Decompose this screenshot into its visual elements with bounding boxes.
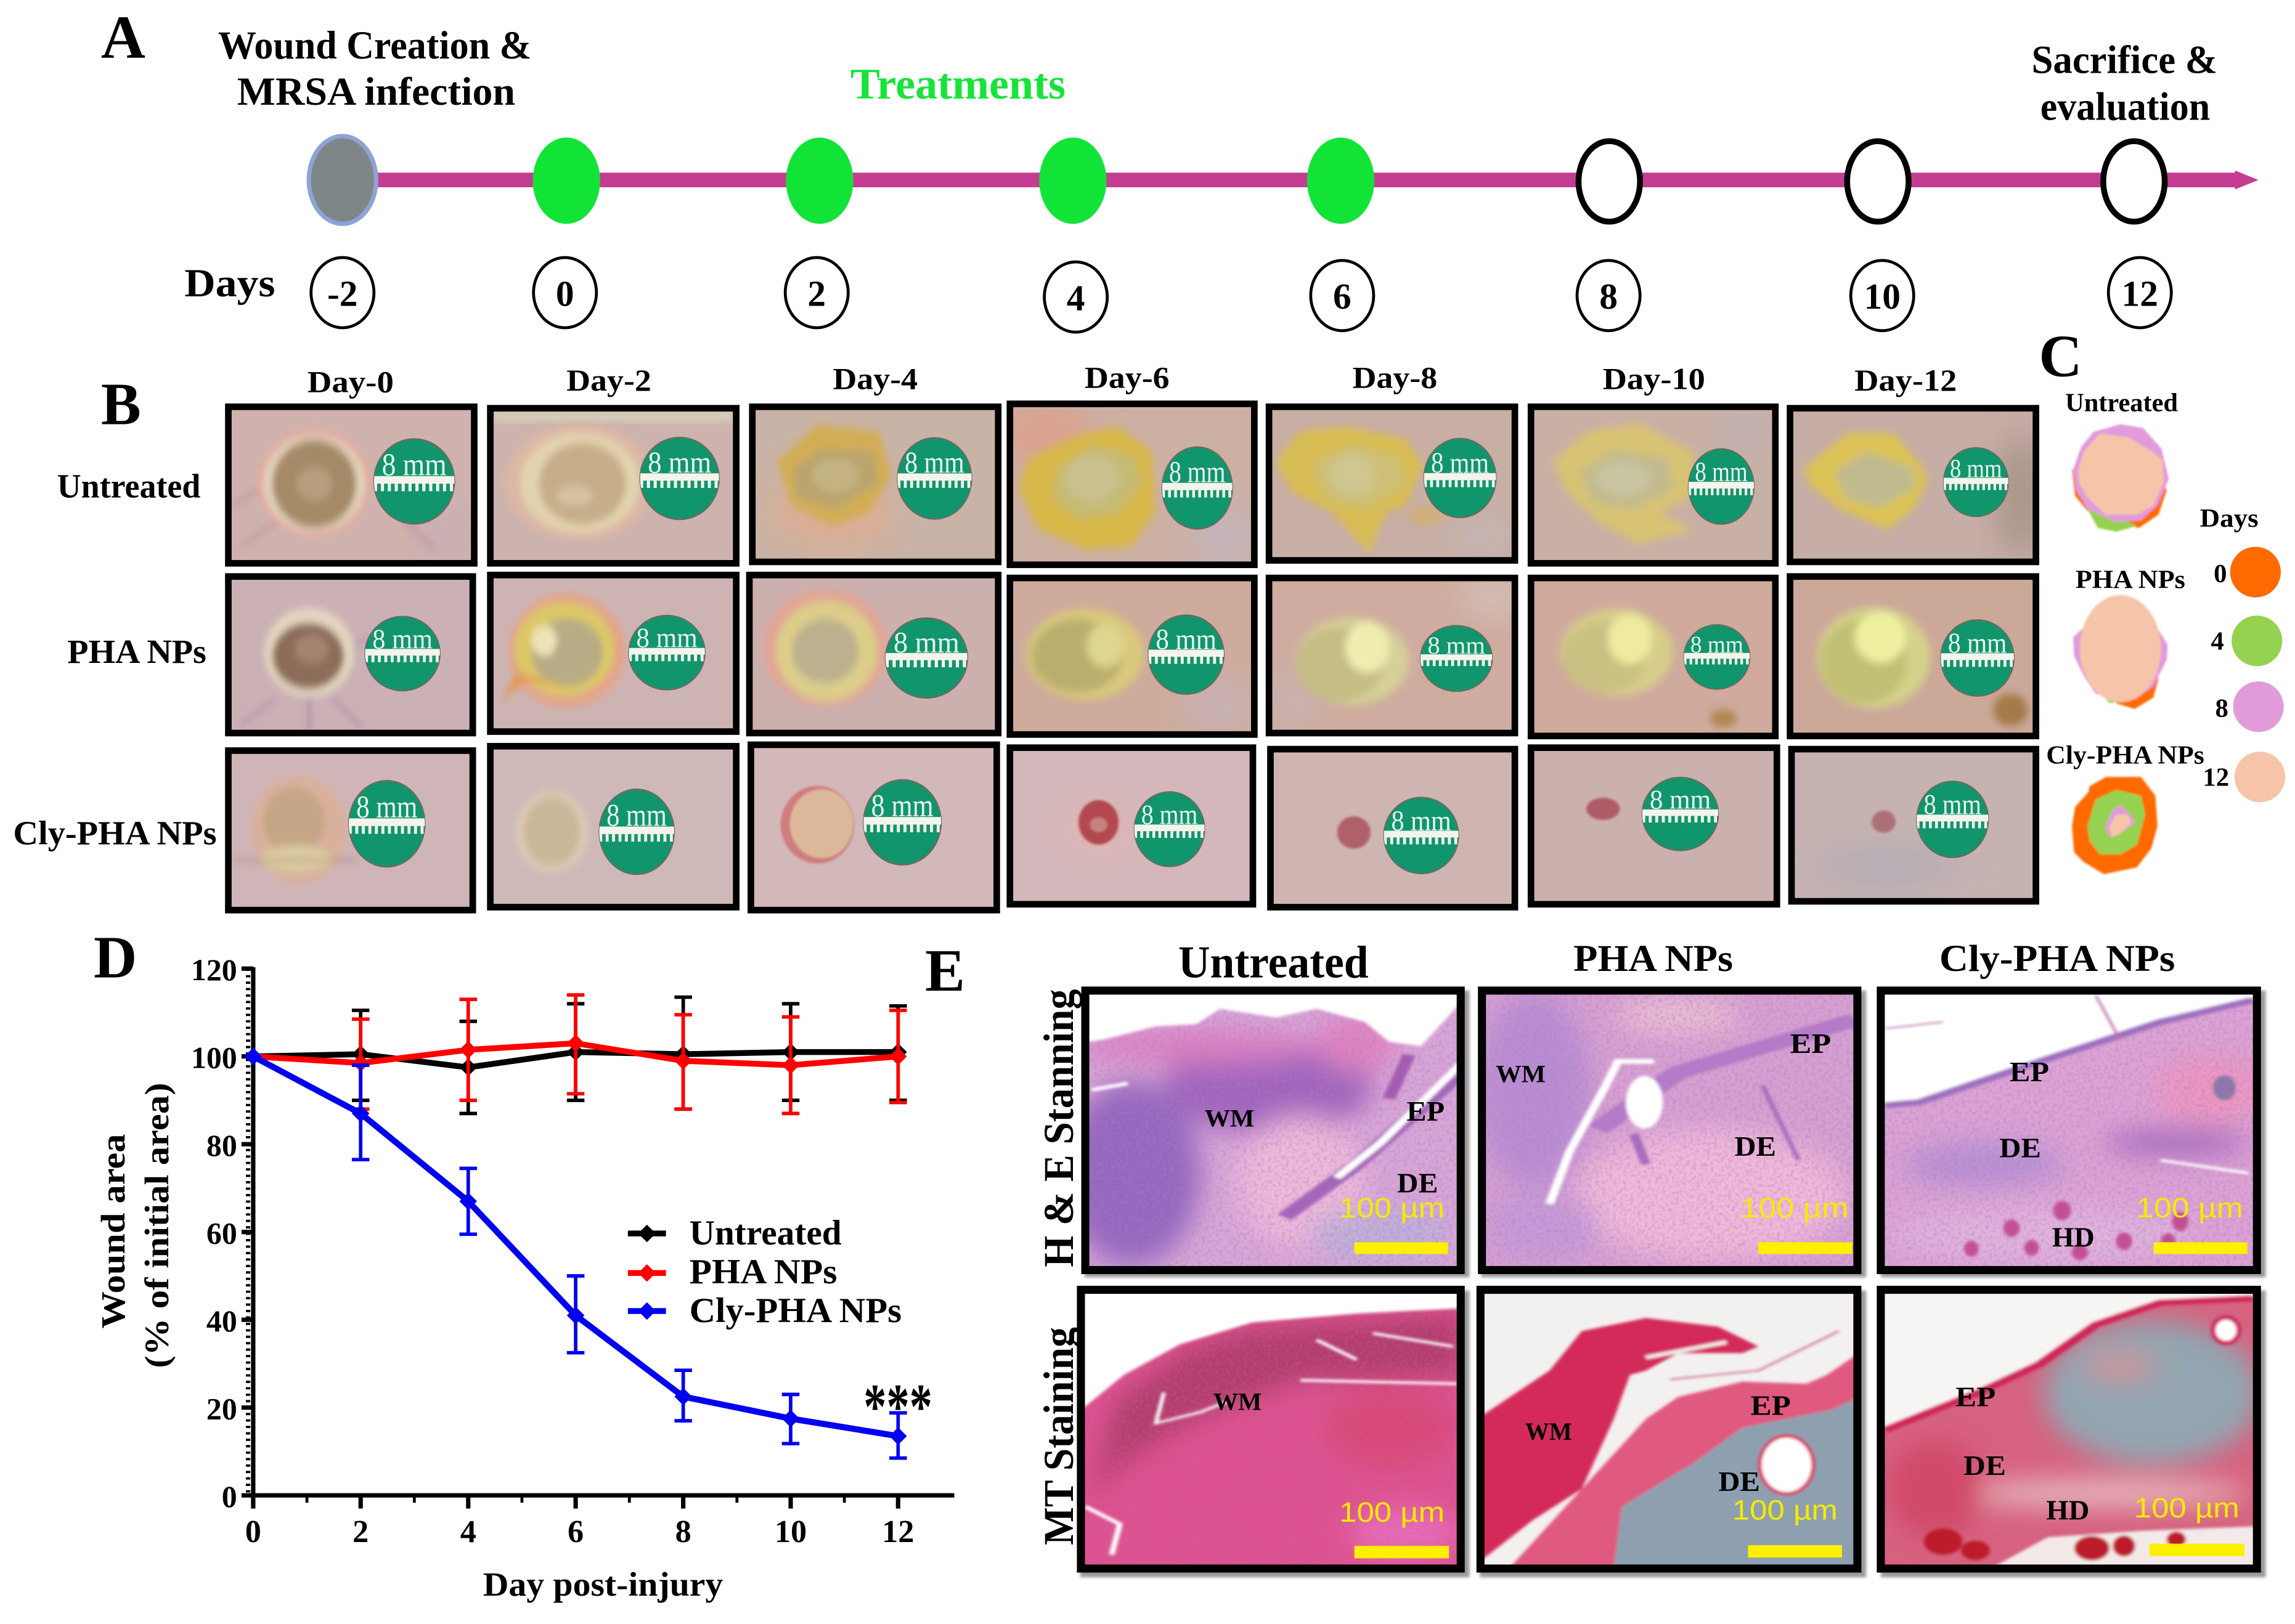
row headings: groups: Cly-PHA NPs bbox=[13, 814, 217, 851]
x axis tick labels: 0 bbox=[245, 1514, 261, 1549]
legend: days: 0 bbox=[2214, 559, 2227, 588]
column headings bbox=[1178, 936, 2175, 987]
photo: untreated day 10 bbox=[1531, 407, 1780, 563]
photo: Cly-PHA day 10 bbox=[1531, 748, 1777, 904]
photo: PHA day 6 bbox=[1010, 578, 1259, 734]
column headings: days: Day-0 bbox=[308, 365, 394, 399]
x axis tick labels: 8 bbox=[675, 1514, 691, 1549]
labels: EP bbox=[1406, 1096, 1445, 1127]
photo: untreated day 12: 8 mm bbox=[1950, 454, 2002, 483]
labels: DE bbox=[1397, 1168, 1438, 1199]
column headings: days: Day-10 bbox=[1603, 362, 1705, 396]
column headings: Cly-PHA NPs bbox=[1939, 938, 2175, 980]
labels: DE bbox=[1718, 1466, 1760, 1497]
histology: H&E PHA NPs bbox=[1477, 988, 1862, 1273]
axes bbox=[242, 967, 955, 1509]
row headings: groups bbox=[13, 467, 217, 851]
label: WM bbox=[1213, 1387, 1262, 1415]
labels: HD bbox=[2052, 1222, 2095, 1253]
photo: untreated day 4: 8 mm bbox=[905, 446, 964, 480]
x axis title: Day post-injury bbox=[483, 1565, 723, 1603]
label: days: Days bbox=[184, 261, 275, 305]
labels: EP bbox=[1750, 1391, 1791, 1421]
labels bbox=[1496, 1028, 1831, 1162]
labels: DE bbox=[1999, 1133, 2041, 1164]
scale bar: 100 µm bbox=[2136, 1192, 2243, 1224]
photo: Cly-PHA day 6: 8 mm bbox=[1141, 799, 1197, 830]
day number circles: 12 bbox=[2122, 273, 2158, 314]
column headings: days: Day-4 bbox=[833, 362, 918, 396]
label: wound creation: MRSA infection bbox=[237, 70, 515, 113]
day number circles: -2 bbox=[327, 273, 357, 314]
row headings bbox=[1035, 989, 1082, 1545]
column headings: Untreated bbox=[1178, 936, 1369, 987]
series: Cly-PHA NPs bbox=[245, 1047, 907, 1458]
day number circles: 0 bbox=[556, 273, 574, 314]
column headings: days bbox=[308, 360, 1957, 399]
tracing labels: PHA NPs bbox=[2076, 566, 2185, 595]
label: treatments: Treatments bbox=[850, 60, 1066, 108]
panel letter A: A bbox=[101, 3, 145, 71]
significance stars: *** bbox=[863, 1371, 932, 1442]
labels bbox=[1955, 1381, 2089, 1525]
panel letter C: C bbox=[2039, 323, 2082, 389]
scale bar bbox=[1732, 1494, 1842, 1557]
scale bar: 100 µm bbox=[1339, 1496, 1445, 1528]
scale bar: 100 µm bbox=[1740, 1192, 1849, 1224]
scale bar: 100 µm bbox=[2134, 1492, 2240, 1524]
labels bbox=[1999, 1057, 2095, 1253]
day number circles: 10 bbox=[1864, 276, 1901, 317]
y axis tick labels bbox=[191, 953, 237, 1514]
y axis title bbox=[94, 1082, 176, 1368]
tracing: PHA NPs bbox=[2073, 595, 2168, 709]
legend bbox=[628, 1214, 902, 1330]
panel B: wound photographs bbox=[13, 360, 2044, 910]
panel C: wound area tracings bbox=[2039, 323, 2285, 874]
photo: Cly-PHA day 10: 8 mm bbox=[1650, 785, 1711, 815]
photo: Cly-PHA day 12: 8 mm bbox=[1923, 789, 1981, 820]
x axis tick labels: 2 bbox=[353, 1514, 369, 1549]
panel letter B: B bbox=[101, 371, 141, 438]
photo: Cly-PHA day 2 bbox=[491, 746, 736, 907]
legend: Cly-PHA NPs bbox=[690, 1291, 902, 1330]
histology: H&E untreated bbox=[1064, 987, 1465, 1273]
photo: Cly-PHA day 4: 8 mm bbox=[871, 788, 934, 823]
legend: days: 8 bbox=[2216, 694, 2228, 723]
legend: days: Days bbox=[2200, 504, 2259, 533]
legend: days: 4 bbox=[2211, 627, 2224, 656]
row headings: MT Staining bbox=[1035, 1327, 1082, 1545]
legend: PHA NPs bbox=[690, 1253, 838, 1291]
scale bar bbox=[2136, 1192, 2248, 1254]
photo: PHA day 6: 8 mm bbox=[1156, 623, 1217, 656]
y axis tick labels: 40 bbox=[206, 1304, 237, 1338]
x axis tick labels: 12 bbox=[882, 1514, 914, 1549]
row headings: H & E Stanning bbox=[1035, 989, 1082, 1267]
y axis title: Wound area bbox=[94, 1134, 132, 1328]
labels: DE bbox=[1963, 1450, 2006, 1481]
photo: untreated day 8: 8 mm bbox=[1431, 446, 1489, 479]
histology: MT Cly-PHA NPs bbox=[1877, 1286, 2265, 1572]
photo: untreated day 2: 8 mm bbox=[648, 445, 711, 479]
scale bar: 100 µm bbox=[1339, 1192, 1445, 1224]
column headings: days: Day-8 bbox=[1352, 360, 1437, 394]
labels: EP bbox=[2010, 1057, 2049, 1087]
labels: EP bbox=[1790, 1028, 1831, 1059]
y axis tick labels: 0 bbox=[222, 1480, 237, 1514]
frame shadows bbox=[1080, 991, 2265, 1577]
photo: PHA day 0 bbox=[229, 577, 473, 733]
timeline marker: wound creation day -2 bbox=[309, 136, 376, 224]
labels: WM bbox=[1525, 1418, 1572, 1445]
photo: Cly-PHA day 0: 8 mm bbox=[356, 789, 417, 825]
tracing labels: Cly-PHA NPs bbox=[2046, 741, 2204, 770]
panel E: histology bbox=[925, 936, 2265, 1577]
labels: EP bbox=[1955, 1381, 1995, 1412]
photo: untreated day 12 bbox=[1790, 408, 2044, 562]
series: untreated bbox=[253, 997, 907, 1113]
photo: PHA day 12 bbox=[1790, 577, 2036, 736]
photo: untreated day 0: 8 mm bbox=[382, 447, 447, 482]
legend: days bbox=[2200, 504, 2285, 802]
x axis tick labels: 6 bbox=[568, 1514, 584, 1549]
column headings: days: Day-12 bbox=[1854, 363, 1957, 397]
day number circles: 8 bbox=[1599, 276, 1618, 317]
photo: untreated day 0 bbox=[229, 407, 475, 563]
scale bar: 100 µm bbox=[1732, 1494, 1838, 1525]
photo: PHA day 8 bbox=[1266, 577, 1526, 733]
photo: untreated day 10: 8 mm bbox=[1695, 457, 1748, 488]
photo: Cly-PHA day 8 bbox=[1270, 749, 1515, 907]
label: wound creation: Wound Creation & bbox=[218, 23, 531, 67]
timeline markers: untreated days bbox=[1578, 141, 2165, 222]
photo: untreated day 4 bbox=[752, 407, 998, 562]
panel D: wound area chart bbox=[94, 924, 955, 1603]
row headings: groups: Untreated bbox=[57, 467, 200, 505]
y axis tick labels: 100 bbox=[191, 1041, 237, 1075]
labels bbox=[1525, 1391, 1791, 1497]
photo: PHA day 8: 8 mm bbox=[1427, 633, 1485, 660]
tracing labels: Untreated bbox=[2065, 388, 2178, 417]
photo: Cly-PHA day 4 bbox=[751, 745, 997, 910]
photo: PHA day 0: 8 mm bbox=[372, 623, 433, 654]
scale bar bbox=[2134, 1492, 2244, 1556]
photo: Cly-PHA day 6 bbox=[1010, 748, 1253, 904]
x axis tick labels bbox=[245, 1514, 914, 1549]
y axis title: (% of initial area) bbox=[138, 1082, 176, 1368]
column headings: days: Day-2 bbox=[566, 363, 651, 397]
photo: Cly-PHA day 12 bbox=[1792, 749, 2036, 901]
scale bar bbox=[1339, 1192, 1448, 1254]
timeline markers: treatment days bbox=[533, 137, 1374, 224]
labels: HD bbox=[2046, 1495, 2089, 1525]
column headings: PHA NPs bbox=[1573, 938, 1733, 980]
photo: PHA day 2 bbox=[491, 575, 736, 731]
photo: Cly-PHA day 2: 8 mm bbox=[606, 798, 667, 833]
panel A: treatment timeline bbox=[101, 3, 2259, 332]
photo: Cly-PHA day 8: 8 mm bbox=[1391, 805, 1451, 836]
photo: untreated day 6: 8 mm bbox=[1169, 456, 1226, 489]
label: sacrifice and evaluation bbox=[2031, 38, 2217, 129]
photo: untreated day 8 bbox=[1269, 407, 1515, 561]
y axis tick labels: 60 bbox=[206, 1217, 237, 1251]
labels: WM bbox=[1496, 1060, 1546, 1087]
panel letter D: D bbox=[94, 924, 137, 991]
x axis tick labels: 10 bbox=[775, 1514, 807, 1549]
day number circles: 4 bbox=[1067, 277, 1085, 318]
legend: Untreated bbox=[690, 1214, 842, 1253]
scale bar bbox=[1740, 1192, 1852, 1254]
column headings: days: Day-6 bbox=[1085, 360, 1170, 394]
day number circles: 6 bbox=[1333, 276, 1351, 317]
photo: untreated day 6 bbox=[998, 404, 1259, 565]
day number circles: 2 bbox=[807, 273, 826, 314]
y axis tick labels: 120 bbox=[191, 953, 237, 987]
day number circles bbox=[311, 258, 2171, 332]
photo: PHA day 4: 8 mm bbox=[894, 625, 960, 659]
scale bar bbox=[1339, 1496, 1449, 1558]
row headings: groups: PHA NPs bbox=[67, 633, 206, 670]
histology: MT untreated bbox=[1075, 1286, 1464, 1572]
labels: WM bbox=[1205, 1105, 1254, 1132]
series: PHA NPs bbox=[253, 995, 907, 1113]
photo: PHA day 12: 8 mm bbox=[1948, 627, 2007, 659]
label: sacrifice and evaluation: evaluation bbox=[2040, 85, 2210, 129]
histology: MT PHA NPs bbox=[1477, 1286, 1861, 1572]
label: wound creation bbox=[218, 23, 531, 113]
label: sacrifice and evaluation: Sacrifice & bbox=[2031, 38, 2217, 82]
tracing labels bbox=[2046, 388, 2204, 770]
photo: PHA day 10: 8 mm bbox=[1690, 631, 1743, 658]
legend: days: 12 bbox=[2203, 763, 2229, 792]
tracing: Cly-PHA NPs bbox=[2072, 777, 2158, 874]
arrow: timeline axis bbox=[366, 171, 2259, 190]
labels bbox=[1205, 1096, 1445, 1199]
y axis tick labels: 80 bbox=[206, 1129, 237, 1163]
panel letter E: E bbox=[925, 938, 965, 1004]
photo: PHA day 10 bbox=[1531, 578, 1775, 736]
histology: H&E Cly-PHA NPs bbox=[1877, 987, 2265, 1273]
photo: untreated day 2 bbox=[491, 408, 736, 563]
x axis tick labels: 4 bbox=[460, 1514, 476, 1549]
photo: Cly-PHA day 0 bbox=[229, 750, 473, 910]
y axis tick labels: 20 bbox=[206, 1392, 237, 1426]
photo: PHA day 4 bbox=[749, 575, 998, 733]
labels: DE bbox=[1734, 1131, 1776, 1162]
tracing: untreated bbox=[2072, 424, 2169, 532]
photo: PHA day 2: 8 mm bbox=[636, 622, 698, 654]
